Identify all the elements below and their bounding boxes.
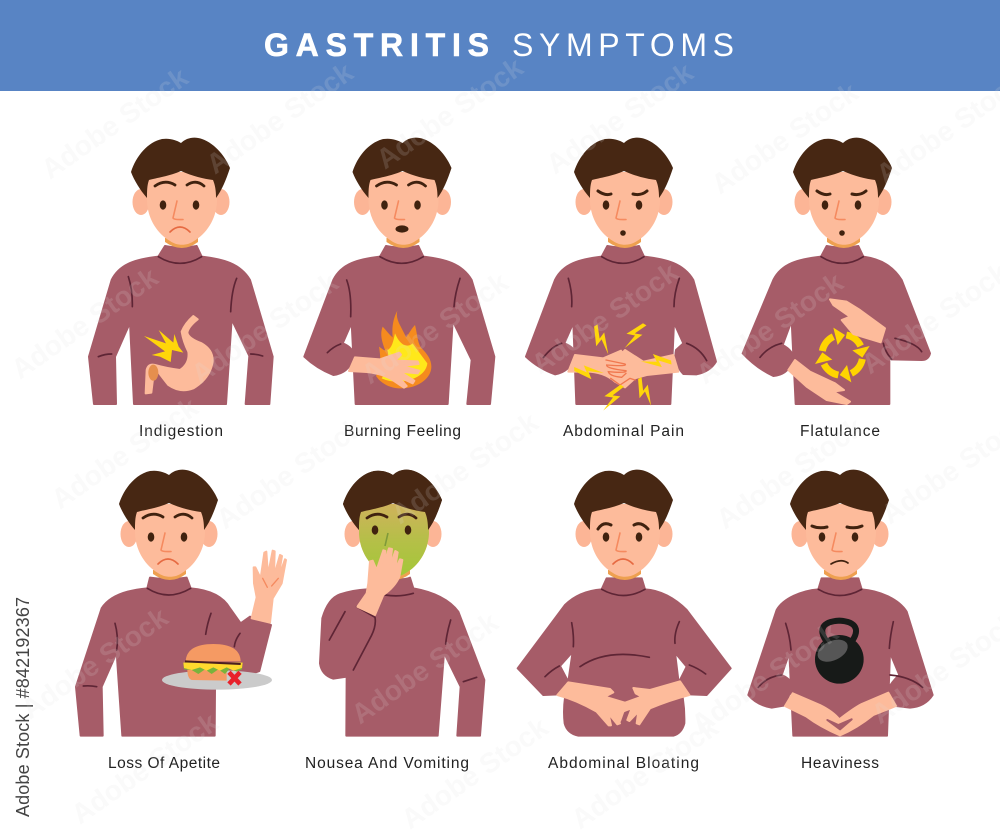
body: bloating xyxy=(518,578,731,736)
head: heaviness xyxy=(790,470,889,580)
hands xyxy=(785,693,896,735)
watermarks: Adobe Stock xyxy=(371,51,529,175)
hand xyxy=(349,353,419,388)
watermarks: Adobe Stock xyxy=(201,56,359,180)
icon: burger on plate xyxy=(162,644,272,690)
body: burning feeling xyxy=(304,246,494,404)
body: flatulance xyxy=(743,246,930,404)
body: heaviness xyxy=(748,578,933,736)
head: nousea xyxy=(343,470,442,580)
hands xyxy=(557,681,689,725)
watermarks: Adobe Stock xyxy=(356,266,514,390)
watermarks: Adobe Stock xyxy=(46,391,204,515)
icon: pain bolts xyxy=(574,319,672,415)
icon: flame xyxy=(376,311,431,388)
figure: burning feeling xyxy=(304,138,494,404)
watermarks: Adobe Stock xyxy=(186,266,344,390)
watermarks: Adobe Stock xyxy=(691,266,849,390)
title banner xyxy=(0,0,1000,91)
watermarks: Adobe Stock xyxy=(211,411,369,535)
title banner: GASTRITIS xyxy=(264,27,489,63)
watermarks: Adobe Stock xyxy=(386,406,544,530)
title banner: SYMPTOMS xyxy=(512,27,734,63)
hands xyxy=(788,299,885,404)
stock id vertical text: Adobe Stock | #842192367 xyxy=(13,597,33,817)
body: nousea xyxy=(320,578,484,736)
watermarks: Adobe Stock xyxy=(541,56,699,180)
figure: loss of apetite xyxy=(76,470,286,736)
hand over mouth xyxy=(357,548,402,615)
hands xyxy=(568,350,678,387)
head: bloating xyxy=(574,470,673,580)
head: loss of apetite xyxy=(119,470,218,580)
watermarks: Adobe Stock xyxy=(66,706,224,830)
watermarks: Adobe Stock xyxy=(6,261,164,385)
symptom labels: Heaviness xyxy=(801,755,879,772)
raised hand xyxy=(252,551,286,623)
head: burning feeling xyxy=(352,138,452,248)
symptom labels: Nousea And Vomiting xyxy=(305,755,469,772)
symptom labels xyxy=(108,423,880,772)
body: loss of apetite xyxy=(76,551,286,736)
symptom labels: Abdominal Bloating xyxy=(548,755,699,772)
watermarks: Adobe Stock xyxy=(396,711,554,833)
watermarks: Adobe Stock xyxy=(566,711,724,833)
symptom labels: Abdominal Pain xyxy=(563,423,684,440)
watermarks: Adobe Stock xyxy=(706,76,864,200)
icon: pain spark xyxy=(144,330,183,362)
figure: abdominal pain xyxy=(526,138,716,415)
symptom labels: Flatulance xyxy=(800,423,880,440)
symptom labels: Loss Of Apetite xyxy=(108,755,220,772)
icon: stomach xyxy=(146,316,213,393)
watermarks: Adobe Stock xyxy=(526,256,684,380)
figure: abdominal bloating xyxy=(518,470,731,736)
head: abdominal pain xyxy=(574,138,673,248)
icon: circular arrows xyxy=(815,328,870,382)
watermarks: Adobe Stock xyxy=(346,606,504,730)
figure: flatulance xyxy=(743,138,930,404)
body: abdominal pain xyxy=(526,246,716,415)
watermarks: Adobe Stock xyxy=(36,61,194,185)
body: indigestion xyxy=(89,246,273,404)
figure: heaviness xyxy=(748,470,933,736)
figure: nousea and vomiting xyxy=(320,470,484,736)
icon: kettlebell xyxy=(814,621,864,684)
symptom labels: Indigestion xyxy=(139,423,223,440)
watermarks: Adobe Stock xyxy=(16,601,174,725)
head: flatulance xyxy=(793,138,892,248)
watermarks: Adobe Stock xyxy=(711,411,869,535)
head: indigestion xyxy=(131,138,230,248)
symptom labels: Burning Feeling xyxy=(344,423,461,440)
figure: indigestion xyxy=(89,138,273,404)
watermarks: Adobe Stock xyxy=(686,616,844,740)
